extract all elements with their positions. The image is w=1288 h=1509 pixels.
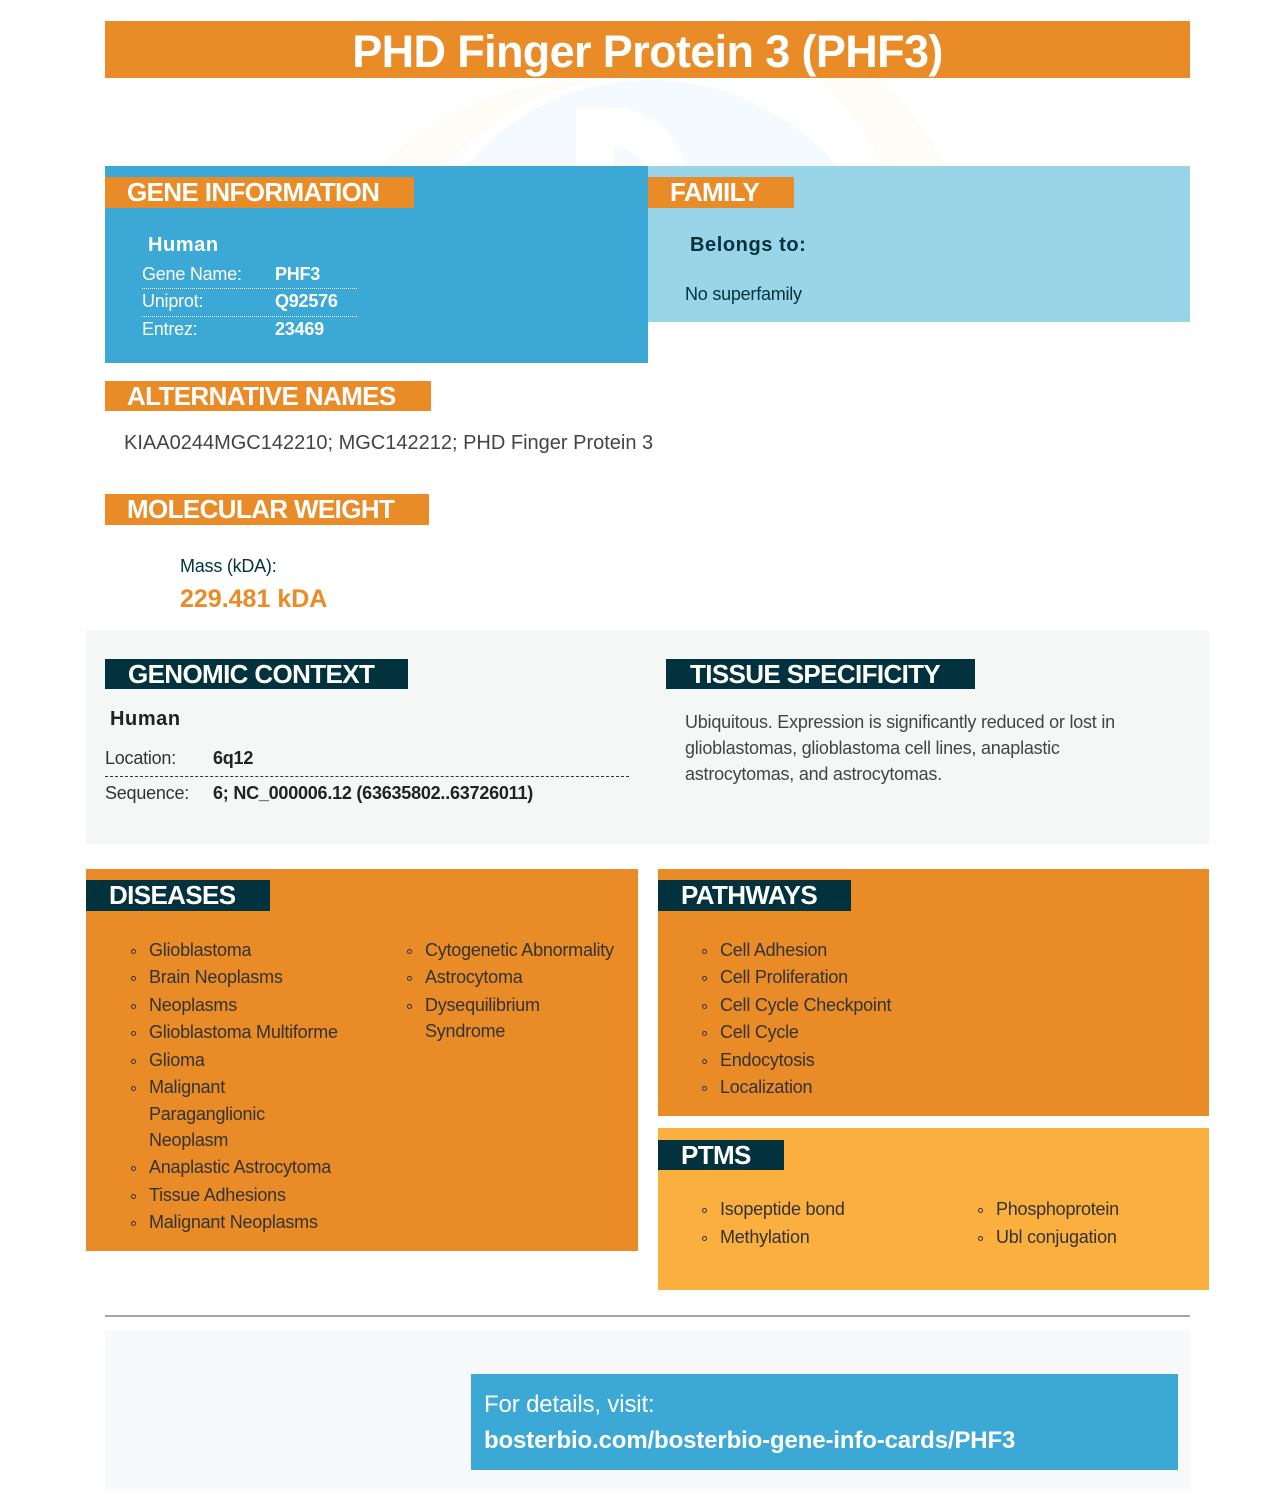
heading: tissue specificity: TISSUE SPECIFICITY <box>690 659 940 689</box>
panel: footer <box>105 1330 1190 1489</box>
list: pathways: Cell Adhesion <box>720 940 827 960</box>
callout: details link <box>471 1374 1178 1470</box>
list: ptms column one <box>702 1199 845 1247</box>
text: alternative names: KIAA0244MGC142210; MGC142212; PHD Finger Protein 3 <box>124 432 653 454</box>
row: location: Location: <box>105 748 176 768</box>
title <box>105 21 1190 78</box>
text: tissue specificity: astrocytomas, and astrocytomas. <box>685 764 942 784</box>
title: PHD Finger Protein 3 (PHF3) <box>352 26 943 77</box>
row: location <box>105 745 629 777</box>
callout url: bosterbio.com/bosterbio-gene-info-cards/PHF3 <box>484 1427 1015 1454</box>
text: tissue specificity: glioblastomas, glioblastoma cell lines, anaplastic <box>685 738 1060 758</box>
row: entrez: Entrez: <box>142 319 197 339</box>
list: pathways: Cell Proliferation <box>720 967 848 987</box>
heading: genomic context: GENOMIC CONTEXT <box>128 659 374 689</box>
row: sequence <box>105 783 533 803</box>
row: gene name: PHF3 <box>275 264 320 284</box>
list: ptms column one: Methylation <box>720 1227 810 1247</box>
list: diseases column one: Neoplasm <box>149 1130 228 1150</box>
list: diseases column two <box>407 940 614 1041</box>
list: ptms column two: Ubl conjugation <box>996 1227 1117 1247</box>
list: diseases column one: Tissue Adhesions <box>149 1185 286 1205</box>
list: pathways: Endocytosis <box>720 1050 815 1070</box>
row: entrez <box>142 319 324 339</box>
list: diseases column one: Glioma <box>149 1050 205 1070</box>
watermark logo <box>466 80 838 166</box>
list: diseases column one: Anaplastic Astrocytoma <box>149 1157 331 1177</box>
heading: pathways: PATHWAYS <box>681 880 817 910</box>
row: location: 6q12 <box>213 748 253 768</box>
species label: Human <box>110 708 181 730</box>
row: uniprot: Uniprot: <box>142 291 203 311</box>
heading: pathways <box>658 880 851 911</box>
heading: molecular weight: MOLECULAR WEIGHT <box>127 494 394 524</box>
mass value: 229.481 kDA <box>180 585 327 613</box>
list: diseases column two: Dysequilibrium <box>425 995 540 1015</box>
heading: ptms <box>658 1140 784 1170</box>
row: uniprot <box>142 288 357 317</box>
list: ptms column one: Isopeptide bond <box>720 1199 845 1219</box>
heading: family <box>648 177 794 208</box>
mass label: Mass (kDA): <box>180 556 276 576</box>
list: pathways: Cell Cycle <box>720 1022 799 1042</box>
list: ptms column two <box>978 1199 1119 1247</box>
heading: diseases: DISEASES <box>109 880 235 910</box>
list: pathways <box>702 940 892 1097</box>
row: entrez: 23469 <box>275 319 324 339</box>
list: diseases column one: Glioblastoma Multiforme <box>149 1022 338 1042</box>
list: diseases column one: Brain Neoplasms <box>149 967 283 987</box>
list: diseases column one: Malignant Neoplasms <box>149 1212 318 1232</box>
list: pathways: Localization <box>720 1077 812 1097</box>
callout label: For details, visit: <box>484 1391 655 1418</box>
text: tissue specificity: Ubiquitous. Expression is significantly reduced or lost in <box>685 712 1115 732</box>
list: pathways: Cell Cycle Checkpoint <box>720 995 891 1015</box>
heading: diseases <box>86 880 270 911</box>
panel: genomic context and tissue specificity <box>86 630 1209 844</box>
text: tissue specificity <box>685 712 1115 784</box>
panel: diseases <box>86 869 638 1251</box>
heading: alternative names: ALTERNATIVE NAMES <box>127 381 396 411</box>
list: ptms column two: Phosphoprotein <box>996 1199 1119 1219</box>
species label: Human <box>148 234 219 256</box>
heading: gene information: GENE INFORMATION <box>127 177 379 207</box>
row: gene name: Gene Name: <box>142 264 242 284</box>
list: diseases column one: Malignant <box>149 1077 225 1097</box>
heading: ptms: PTMS <box>681 1140 751 1170</box>
list: diseases column two: Cytogenetic Abnormality <box>425 940 614 960</box>
panel: family <box>648 166 1190 322</box>
belongs to label: Belongs to: <box>690 234 806 256</box>
list: diseases column one: Neoplasms <box>149 995 237 1015</box>
family value: No superfamily <box>685 284 802 304</box>
panel: gene information <box>105 166 648 363</box>
list: diseases column two: Syndrome <box>425 1021 505 1041</box>
list: diseases column one <box>131 940 338 1232</box>
row: gene name <box>142 261 357 289</box>
panel: genomic context and tissue specificity: 6; NC_000006.12 (63635802..63726011) <box>213 783 533 803</box>
list: diseases column one: Glioblastoma <box>149 940 251 960</box>
panel: ptms <box>658 1128 1209 1290</box>
heading: family: FAMILY <box>670 177 759 207</box>
row: uniprot: Q92576 <box>275 291 338 311</box>
row: sequence: Sequence: <box>105 783 189 803</box>
panel: pathways <box>658 869 1209 1116</box>
list: diseases column one: Paraganglionic <box>149 1104 265 1124</box>
list: diseases column two: Astrocytoma <box>425 967 522 987</box>
